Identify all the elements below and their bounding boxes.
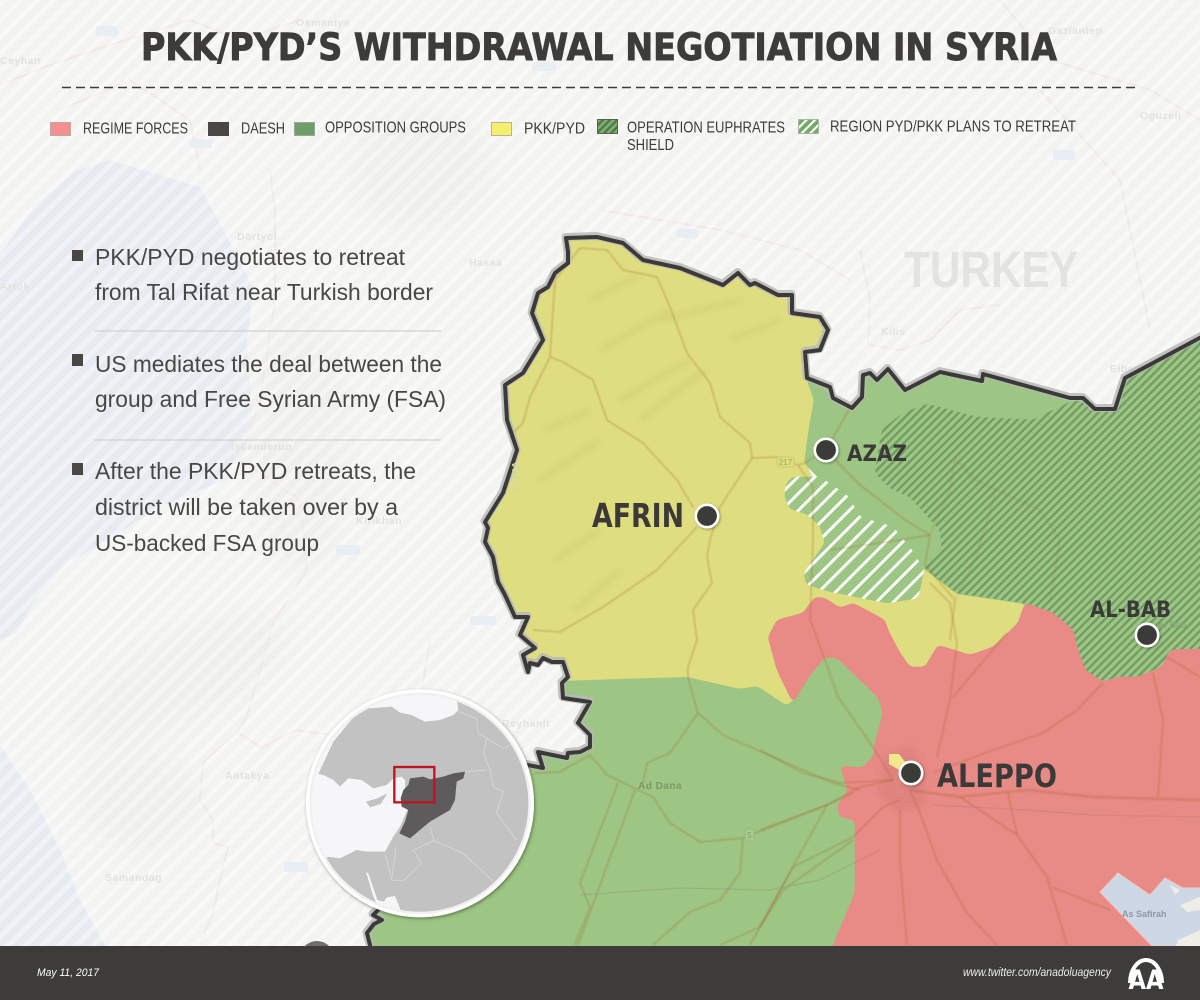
territory: opposition groups north (green)	[805, 327, 1200, 700]
legend: Daesh	[208, 120, 285, 138]
country label: Turkey: TURKEY	[904, 241, 1078, 298]
icon: Anadolu Agency logo: AA	[1128, 965, 1164, 996]
locator inset map	[306, 689, 534, 917]
base map: road signs	[96, 26, 1075, 872]
inset: Cyprus	[366, 793, 387, 807]
territory: PKK/PYD (yellow)	[485, 237, 1025, 707]
border between Turkey and Syria	[366, 236, 1200, 945]
footer bar	[0, 946, 1200, 1000]
territory: yellow enclave in Aleppo	[889, 754, 906, 771]
inset: land	[310, 698, 533, 917]
legend: PKK/PYD	[492, 120, 585, 138]
legend: Operation Euphrates Shield: OPERATION EUPHRATES	[627, 120, 785, 136]
base map: faint place names: Ceyhan	[0, 55, 41, 67]
key point 3: district will be taken over by a	[95, 494, 398, 520]
map labels on territory: Ad Dana	[638, 781, 682, 792]
road network	[513, 248, 1200, 945]
key point 3: After the PKK/PYD retreats, the	[95, 458, 416, 484]
city: Aleppo: ALEPPO	[937, 757, 1057, 795]
map labels on territory: Al Bab	[1158, 620, 1187, 630]
city: Al-Bab	[1090, 598, 1171, 646]
legend: opposition groups: OPPOSITION GROUPS	[325, 120, 466, 136]
title: PKK/PYD’S WITHDRAWAL NEGOTIATION IN SYRIA	[141, 26, 1057, 69]
inset: country borders	[385, 712, 517, 882]
road shield: 217: 217	[779, 458, 793, 467]
city: Azaz	[815, 439, 907, 467]
base map: faint place names: Osmaniye	[296, 17, 350, 29]
legend	[50, 118, 1076, 154]
key point 2	[72, 351, 446, 412]
base map: terrain shading	[52, 110, 490, 850]
territory: regime forces (red)	[768, 597, 1200, 960]
faint border labels: SYRIA	[511, 461, 522, 492]
base map: faint place names: Artuk	[0, 281, 30, 293]
salt lake: As Safirah	[1100, 873, 1200, 946]
legend: regime forces	[50, 120, 188, 138]
base map: faint place names: Hassa	[469, 257, 502, 269]
footer: source link: www.twitter.com/anadoluagency	[963, 967, 1112, 979]
base map: faint place names: Kilis	[881, 326, 906, 338]
city: Aleppo	[900, 757, 1057, 795]
legend: regime forces: REGIME FORCES	[83, 120, 188, 138]
base map: faint place names: Samandag	[105, 872, 162, 884]
base map: Mediterranean sea	[0, 160, 253, 946]
key point 1: from Tal Rifat near Turkish border	[95, 279, 433, 305]
inset: red focus rectangle	[394, 767, 434, 802]
key point 1: PKK/PYD negotiates to retreat	[95, 244, 406, 270]
legend: Operation Euphrates Shield	[598, 120, 785, 154]
footer: date: May 11, 2017	[37, 967, 100, 979]
territory: region PYD/PKK plans to retreat (white stripes)	[784, 476, 924, 603]
base map: faint place names: Gaziantep	[1048, 25, 1103, 37]
key point 1	[72, 244, 433, 305]
key point 2: US mediates the deal between the	[95, 351, 442, 377]
terrain shading in Afrin	[540, 275, 780, 610]
road shield: 5: 5	[747, 831, 752, 840]
base map: partial marker near footer	[300, 941, 334, 975]
salt lake: As Safirah: As Safirah	[1122, 909, 1167, 919]
legend: PKK/PYD: PKK/PYD	[524, 120, 585, 138]
inset: Syria	[399, 772, 465, 838]
city: Al-Bab: AL-BAB	[1090, 598, 1171, 623]
territory: opposition groups south-west (green)	[360, 657, 883, 960]
base map: faint place names: Elbeyli	[1110, 363, 1147, 375]
Aleppo urban area shading	[878, 745, 925, 812]
base map: faint place names: İskenderun	[231, 440, 292, 453]
key point 3	[72, 458, 416, 556]
base map: faint place names: Reyhanli	[502, 718, 550, 730]
legend: Operation Euphrates Shield: SHIELD	[627, 137, 674, 154]
base map: faint place names: Oguzeli	[1140, 110, 1181, 122]
map labels on territory	[638, 620, 1187, 792]
key point 3: US-backed FSA group	[95, 530, 319, 556]
road shield: 5	[745, 829, 754, 841]
city: Azaz: AZAZ	[847, 442, 907, 467]
key point 2: group and Free Syrian Army (FSA)	[95, 386, 446, 412]
legend: region PYD/PKK plans to retreat: REGION PYD/PKK PLANS TO RETREAT	[830, 118, 1076, 136]
legend: Daesh: DAESH	[241, 120, 285, 138]
dashed divider under title	[62, 86, 1140, 88]
base map: faint place names: Dörtyol	[237, 231, 277, 243]
railway line	[580, 805, 1200, 895]
base map: faint place names: Kirikhan	[356, 515, 402, 527]
territory: Operation Euphrates Shield (dark green stripes)	[875, 342, 1200, 680]
key points text	[72, 244, 446, 556]
city: Afrin: AFRIN	[592, 496, 684, 535]
base map: faint place names: Antakya	[225, 770, 269, 782]
